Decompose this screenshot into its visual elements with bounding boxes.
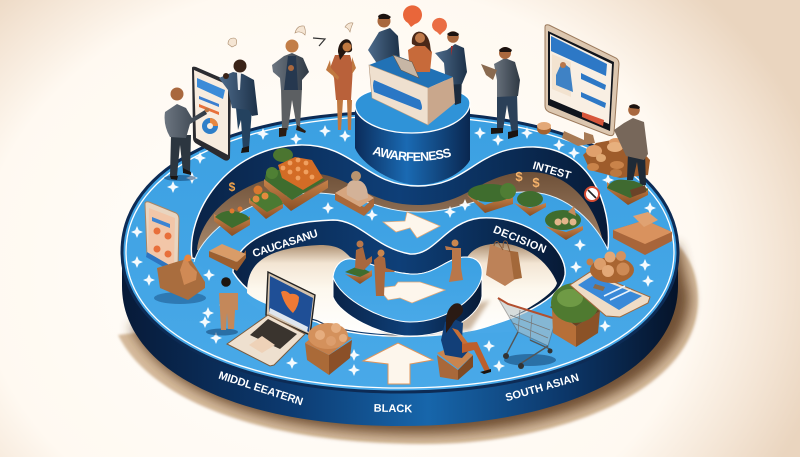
box inner: [369, 55, 453, 88]
person: man behind the box: [368, 14, 400, 65]
shopping cart: [498, 298, 556, 369]
person: bald man with phone: [272, 40, 309, 137]
outer disc: [122, 112, 678, 426]
box left face: [369, 65, 428, 125]
box right face: [428, 77, 455, 125]
laptop screen: [266, 272, 315, 335]
disc drop shadow: [118, 245, 698, 444]
heart: [281, 291, 299, 313]
dollar mid: $: [515, 169, 523, 184]
star decorations: [131, 125, 656, 376]
basket A: [467, 195, 513, 213]
person: small wooden figure: [206, 277, 238, 336]
label: south asian: SOUTH ASIAN: [504, 372, 581, 404]
bubble: white mid: [295, 26, 305, 35]
reception box with laptop: [369, 32, 455, 125]
basket on island: [345, 270, 372, 284]
person: man beside the laptop: [435, 31, 467, 105]
bubble: orange large: [403, 5, 422, 27]
laptop base: [227, 315, 305, 366]
bubble: orange small: [432, 18, 447, 35]
pastries: [586, 251, 634, 283]
baskets: right greenery pair: [467, 183, 583, 240]
basket: right greenery: [607, 180, 648, 205]
dress: [441, 318, 472, 358]
icon: small phone left: [145, 202, 179, 274]
crate with shrub: [550, 283, 600, 347]
second level surface: [194, 192, 608, 340]
person: man beside monitor: [614, 104, 648, 185]
basket C: [545, 226, 583, 240]
stage wall: [355, 100, 470, 185]
figure kneeling: [355, 247, 372, 270]
wooden seat: [335, 171, 374, 216]
laptop in box: [393, 55, 419, 78]
label: interest: INTEST: [531, 160, 572, 182]
dollar right: $: [532, 175, 540, 190]
disc wall: [122, 252, 678, 426]
dollar left: $: [229, 180, 236, 194]
wood logs: [537, 122, 650, 178]
figure right with arm raised: [445, 246, 463, 282]
label: black: BLACK: [374, 403, 412, 415]
seat box: [437, 355, 458, 380]
island arrow: [378, 282, 445, 303]
inner hole wall: [233, 218, 565, 336]
bubble: small white left: [228, 38, 237, 47]
bubble: white right: [345, 23, 353, 32]
label: awareness: AWARFENESS: [372, 146, 451, 162]
basket: small produce: [249, 186, 283, 219]
wood block stack: [613, 212, 672, 255]
laptop with heart: [227, 272, 315, 366]
person: man in grey suit pointing: [164, 88, 209, 181]
icon: no-sign: [585, 187, 599, 201]
bottom arrow: [363, 343, 433, 384]
central stage: [355, 86, 470, 185]
legs: [462, 342, 490, 372]
channel floor: [197, 172, 604, 300]
disc top surface: [122, 112, 678, 392]
speech bubbles: [228, 5, 447, 47]
basket B: [514, 203, 546, 216]
figure standing: [374, 255, 395, 296]
label: caucasian: CAUCASANU: [251, 228, 320, 260]
icon: computer monitor: [545, 25, 619, 146]
wooden blocks left: [154, 254, 206, 304]
label: decision: DECISION: [491, 224, 548, 256]
bench left: [209, 244, 246, 271]
island shadow: [340, 300, 490, 336]
central island: [333, 257, 490, 336]
basket: small green left: [214, 206, 250, 236]
label: middle eastern: MIDDL EEATERN: [217, 370, 304, 408]
bubble: dark squiggle: [313, 38, 325, 46]
island surface: [333, 257, 482, 322]
person: woman in orange dress: [326, 39, 356, 130]
box blue slot: [373, 80, 422, 110]
credit card tablet: [570, 272, 650, 317]
person: man in navy suit: [219, 60, 258, 153]
icon: tablet with chart: [192, 67, 231, 161]
person: seated woman: [437, 303, 491, 380]
small figures on island: [345, 240, 463, 296]
inner hole floor: [247, 243, 557, 335]
shopping bags: [486, 241, 522, 286]
basket: large produce: [264, 148, 328, 211]
hair: [446, 303, 463, 333]
arm: [452, 328, 468, 344]
woman at the laptop: [408, 44, 432, 72]
island wall: [333, 257, 482, 336]
person: man with tablet: [481, 47, 520, 139]
outer channel wall: [191, 145, 608, 300]
second level edge: [194, 192, 608, 262]
stage top: [355, 86, 470, 133]
center arrow: [383, 212, 440, 238]
dollar signs: [229, 169, 540, 194]
crate of pastries left: [305, 323, 352, 375]
